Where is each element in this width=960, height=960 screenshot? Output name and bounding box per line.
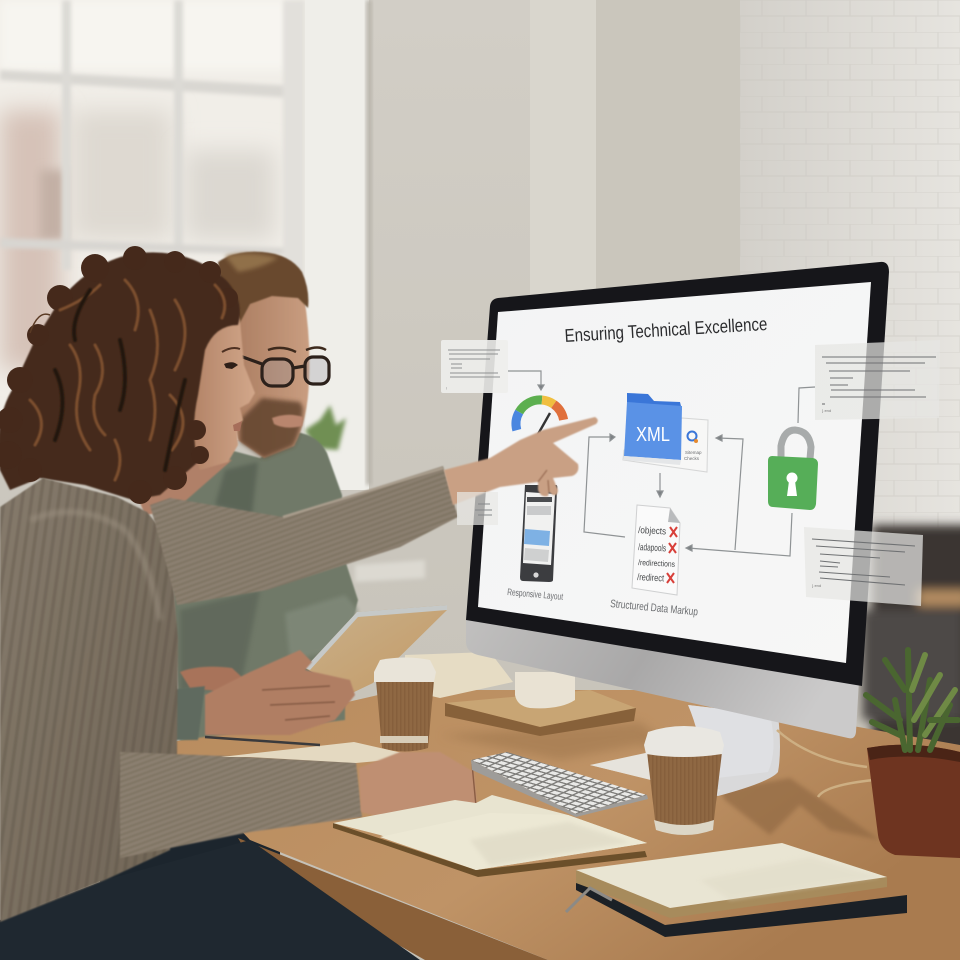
desk xyxy=(160,690,960,960)
window panes xyxy=(0,0,305,440)
small book under mug xyxy=(445,690,636,736)
closed notebook stack xyxy=(566,843,907,937)
padlock icon xyxy=(768,430,818,510)
screen label: structured data markup: Structured Data Markup xyxy=(610,598,698,618)
paper under lower hand xyxy=(221,742,420,763)
pointing arm sleeve xyxy=(150,466,458,605)
document with error marks: /redirections xyxy=(638,558,675,569)
hair xyxy=(0,246,240,504)
man in green shirt xyxy=(170,252,358,740)
monitor xyxy=(466,262,889,738)
document with error marks: /redirect xyxy=(637,572,665,584)
shirt xyxy=(170,432,358,740)
lower arm sleeve xyxy=(120,752,362,858)
eye and brow xyxy=(224,362,238,369)
tablet xyxy=(305,605,447,694)
brow and eyes xyxy=(268,348,326,352)
mouth xyxy=(272,415,303,428)
hair curls xyxy=(30,280,225,480)
screen xyxy=(478,282,871,663)
paper on back of desk xyxy=(405,652,513,698)
XML folder icon with card: Sitemap xyxy=(685,450,702,455)
man's hands xyxy=(168,650,355,740)
floating code panel: bottom right xyxy=(804,527,923,606)
document with error marks: /objects xyxy=(638,525,667,537)
XML label: XML xyxy=(636,424,670,446)
pen on desk xyxy=(205,737,320,745)
leaves xyxy=(866,650,958,750)
cables xyxy=(777,730,874,797)
front coffee cup xyxy=(644,726,724,835)
neck xyxy=(135,455,232,515)
connector lines and arrows xyxy=(508,371,815,556)
potted plant xyxy=(866,650,960,858)
head xyxy=(225,291,309,458)
google badge xyxy=(688,432,696,440)
gauge icon xyxy=(516,400,564,436)
face xyxy=(180,298,255,470)
document with error marks xyxy=(632,505,680,595)
window sill xyxy=(355,560,425,582)
glasses xyxy=(240,356,329,386)
beard xyxy=(240,398,303,458)
white mug behind monitor xyxy=(515,672,575,708)
floating code panel: top left: } xyxy=(446,386,447,390)
desk front face xyxy=(238,838,548,960)
writing hand xyxy=(359,752,477,817)
back coffee cup xyxy=(374,658,436,752)
background plant xyxy=(305,405,346,450)
floating code panel: bottom right: } end xyxy=(812,583,821,588)
floating code panel: top left xyxy=(441,340,508,393)
monitor stand xyxy=(590,705,780,796)
screen title: Ensuring Technical Excellence xyxy=(564,313,768,346)
leaf shadows on desk xyxy=(720,778,880,840)
phone icon xyxy=(520,485,557,582)
desk shadow band xyxy=(440,722,700,770)
floating code panel: top right xyxy=(815,340,940,420)
pointing hand xyxy=(444,417,598,505)
sweater torso xyxy=(0,478,178,922)
dark area under desk xyxy=(100,825,280,960)
black bezel xyxy=(466,262,889,686)
wall column xyxy=(530,0,598,300)
floating code panel: top right: } end xyxy=(822,408,831,413)
keyboard xyxy=(471,752,648,817)
hair xyxy=(218,252,308,330)
screen label: responsive layout: Responsive Layout xyxy=(507,587,564,603)
lips xyxy=(233,421,242,431)
pen clip xyxy=(566,888,612,912)
floating code panel: behind hand xyxy=(457,492,498,525)
pants and chair xyxy=(0,840,420,960)
document with error marks: /adapools xyxy=(638,542,667,554)
dark chair and shelf at right xyxy=(862,525,960,765)
silver chin xyxy=(466,615,859,738)
woman in knit sweater xyxy=(0,246,477,960)
ragged curls around the outline xyxy=(0,246,238,504)
pot xyxy=(867,745,960,858)
brick wall xyxy=(740,0,960,560)
XML folder icon with card: Checks xyxy=(684,456,700,461)
window frame xyxy=(0,0,305,450)
open notebook xyxy=(333,795,647,877)
XML folder icon with card xyxy=(623,393,708,472)
window reveal xyxy=(305,0,369,490)
